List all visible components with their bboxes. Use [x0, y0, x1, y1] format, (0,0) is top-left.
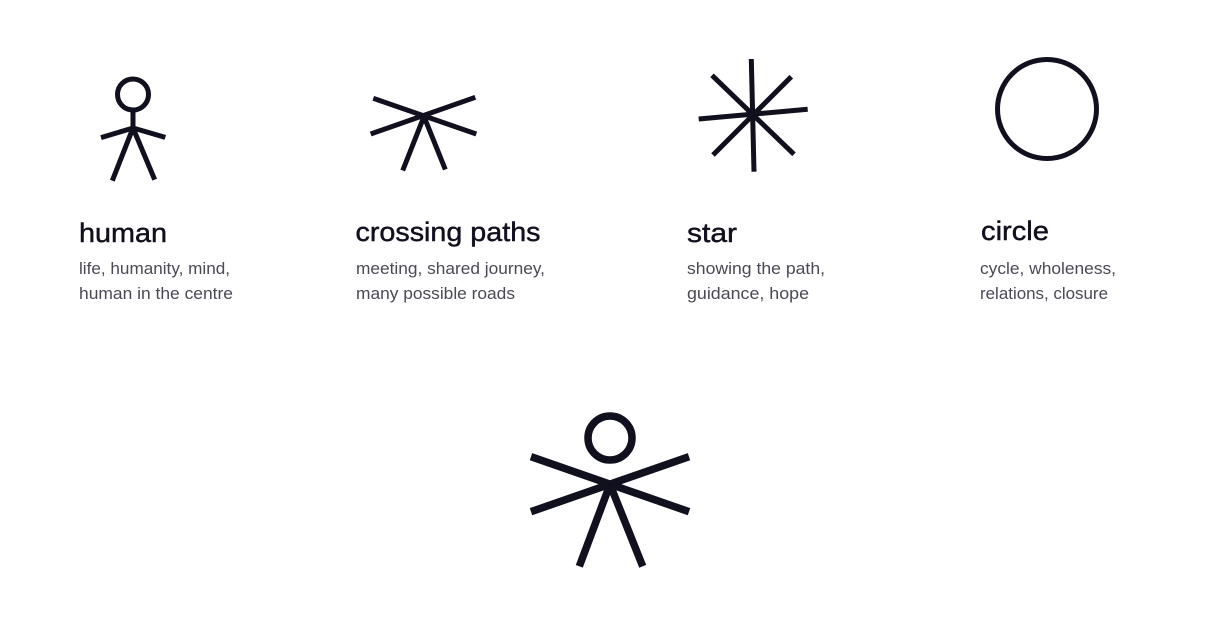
text: crossing paths description: many possible roads	[356, 284, 515, 303]
text: circle description	[980, 259, 1116, 303]
text: star description: guidance, hope	[687, 284, 809, 303]
heading: circle: circle	[981, 216, 1049, 246]
heading: human: human	[79, 218, 167, 248]
panel: human	[79, 79, 233, 303]
text: star description	[687, 259, 825, 303]
text: human description: life, humanity, mind,	[79, 259, 230, 278]
text: crossing paths description	[356, 259, 545, 303]
text: human description: human in the centre	[79, 284, 233, 303]
icon: human figure	[101, 79, 165, 181]
icon: circle	[998, 60, 1096, 158]
icon: crossing paths	[371, 97, 476, 170]
panel: star	[687, 59, 825, 303]
heading: crossing paths: crossing paths	[356, 217, 540, 247]
icon: combined human, paths and circle symbol	[531, 416, 689, 566]
panel: crossing paths	[356, 97, 545, 303]
text: crossing paths description: meeting, shared journey,	[356, 259, 545, 278]
heading: star: star	[687, 218, 737, 248]
panel: circle	[980, 60, 1116, 303]
text: circle description: cycle, wholeness,	[980, 259, 1116, 278]
text: circle description: relations, closure	[980, 284, 1108, 303]
icon: star	[699, 59, 808, 172]
text: star description: showing the path,	[687, 259, 825, 278]
text: human description	[79, 259, 233, 303]
